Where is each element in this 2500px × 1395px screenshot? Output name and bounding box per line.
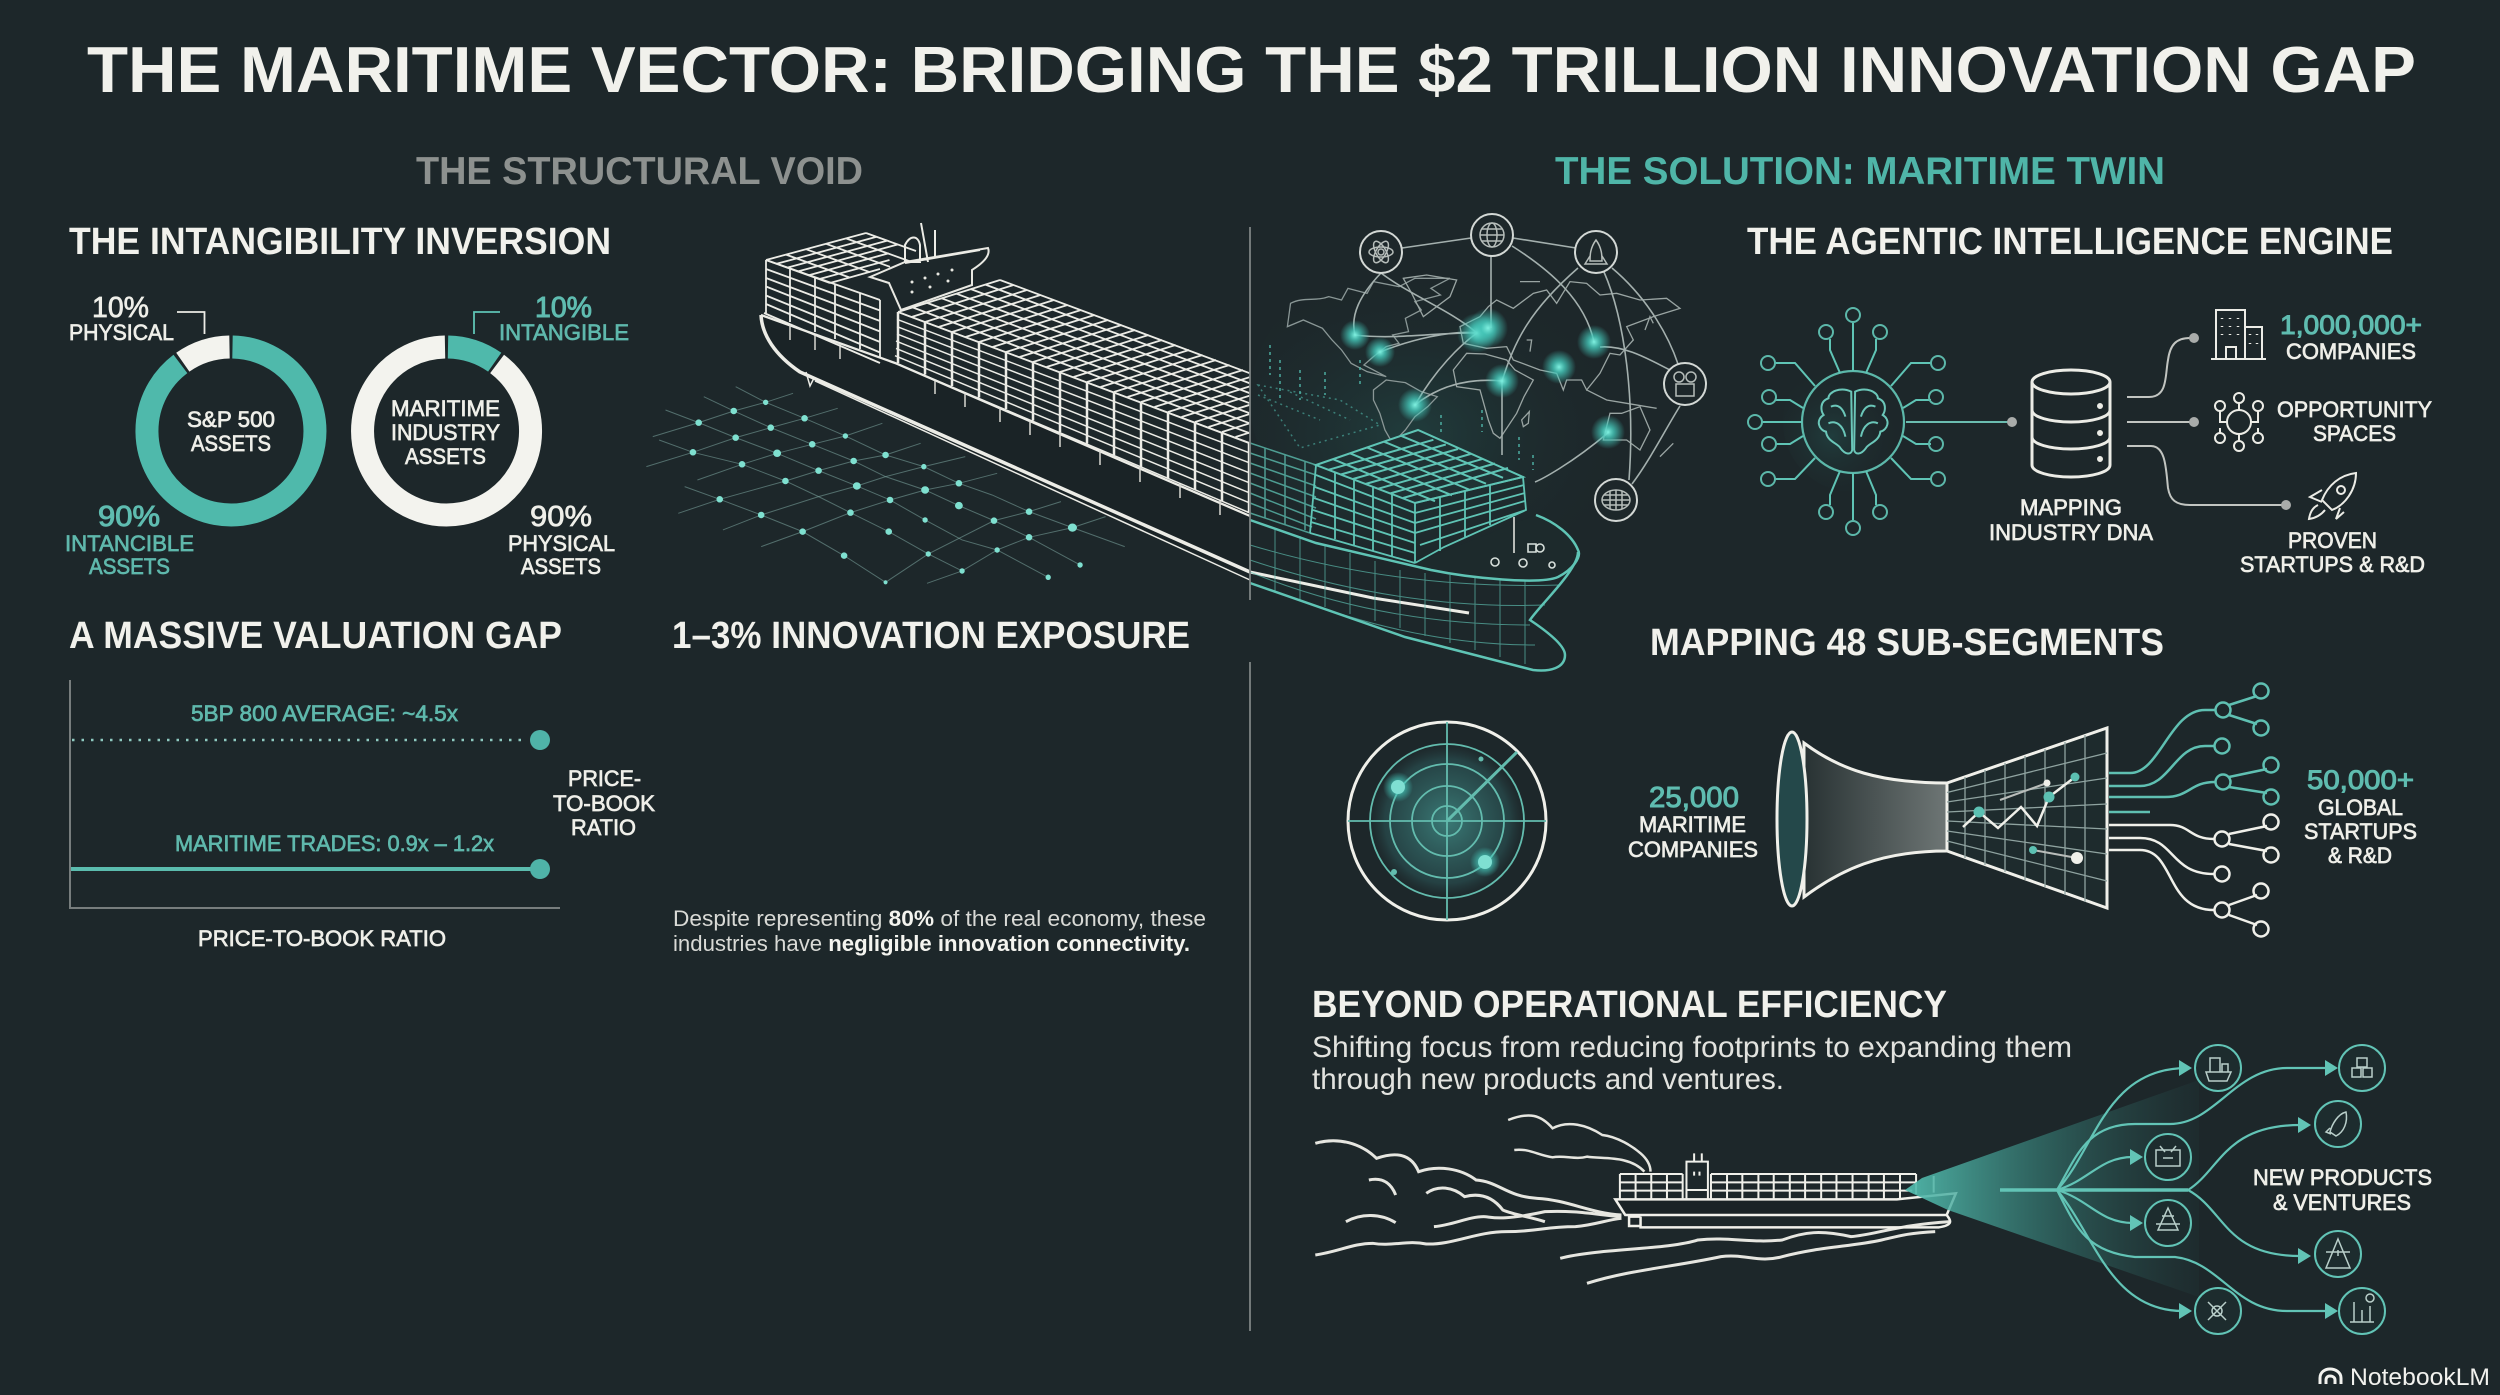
chart: price-to-book comparison: MARITIME TRADES: 0.9x – 1.2x bbox=[175, 831, 494, 856]
icon: outflow branching tree bbox=[2109, 684, 2278, 936]
donut: S&P 500 assets: ASSETS bbox=[191, 431, 271, 456]
label: new products & ventures bbox=[2253, 1165, 2432, 1215]
heading: mapping 48 sub-segments: MAPPING 48 SUB-SEGMENTS bbox=[1650, 622, 2164, 664]
panel: agentic intelligence engine bbox=[1747, 221, 2432, 577]
stat: proven startups: PROVEN bbox=[2288, 528, 2377, 553]
callout: 90% intangible assets: ASSETS bbox=[89, 554, 170, 579]
connectors: database to outputs bbox=[2127, 338, 2282, 505]
branching arrows bbox=[2000, 1068, 2328, 1311]
text block: shifting focus: Shifting focus from reducing footprints to expanding them bbox=[1312, 1031, 2072, 1064]
map: africa, eurasia, australia bbox=[1403, 275, 1680, 457]
panel: mapping 48 sub-segments bbox=[1348, 622, 2417, 936]
donut: maritime industry assets bbox=[363, 347, 531, 515]
icon: brain circuit bbox=[1748, 308, 1945, 535]
icon: radar bbox=[1348, 722, 1546, 920]
panel: innovation exposure: industries have negligible innovation connectivity. bbox=[673, 931, 1190, 956]
heading: intangibility inversion: THE INTANGIBILITY INVERSION bbox=[69, 221, 611, 263]
chart: price-to-book comparison bbox=[70, 680, 655, 951]
superstructure and mast bbox=[870, 223, 989, 310]
callout: 10% physical bbox=[69, 292, 204, 345]
callout: 90% intangible assets: 90% bbox=[98, 501, 160, 533]
title: THE MARITIME VECTOR: BRIDGING THE $2 TRILLION INNOVATION GAP bbox=[87, 33, 2416, 106]
callout: 10% physical: 10% bbox=[92, 292, 149, 324]
label: mapping industry dna: INDUSTRY DNA bbox=[1989, 520, 2153, 545]
illustration: small ship with wake bbox=[1315, 1115, 1956, 1283]
label: new products & ventures: NEW PRODUCTS bbox=[2253, 1165, 2432, 1190]
callout: 90% intangible assets bbox=[65, 501, 194, 579]
divider bbox=[1249, 227, 1251, 1331]
stat: 25,000 maritime companies: COMPANIES bbox=[1628, 837, 1758, 862]
connector endpoints bbox=[2189, 333, 2291, 510]
icon: database bbox=[2032, 370, 2110, 477]
icon: funnel bbox=[1777, 728, 2107, 908]
stat: proven startups bbox=[2240, 528, 2425, 577]
icon: buildings bbox=[2211, 310, 2266, 359]
stat: 1,000,000+ companies: COMPANIES bbox=[2286, 339, 2416, 364]
chart: price-to-book comparison: PRICE- bbox=[568, 766, 641, 791]
stat: opportunity spaces bbox=[2277, 397, 2432, 446]
heading: valuation gap: A MASSIVE VALUATION GAP bbox=[69, 615, 562, 657]
stat: 50,000+ global startups: 50,000+ bbox=[2307, 765, 2414, 795]
stat: 25,000 maritime companies: 25,000 bbox=[1649, 782, 1739, 814]
arrowheads bbox=[2130, 1060, 2338, 1319]
venture icon glyphs bbox=[2156, 1058, 2374, 1322]
stat: 1,000,000+ companies bbox=[2280, 310, 2422, 364]
stat: 50,000+ global startups: & R&D bbox=[2328, 843, 2392, 868]
stat: 25,000 maritime companies: MARITIME bbox=[1639, 812, 1746, 837]
callout: 10% intangible bbox=[474, 292, 629, 345]
smoke and wake bbox=[1315, 1115, 1951, 1283]
mesh: data network under ship bbox=[646, 387, 1125, 584]
chart: price-to-book comparison: 5BP 800 AVERAGE: ~4.5x bbox=[191, 701, 458, 726]
map: americas bbox=[1287, 278, 1450, 443]
venture icons bbox=[2145, 1045, 2385, 1334]
callout: 90% intangible assets: INTANCIBLE bbox=[65, 531, 194, 556]
heading: innovation exposure: 1–3% INNOVATION EXPOSURE bbox=[672, 615, 1190, 657]
donut: S&P 500 assets bbox=[147, 347, 315, 515]
label: mapping industry dna: MAPPING bbox=[2020, 495, 2122, 520]
light cone bbox=[1905, 1080, 2199, 1297]
glowing nodes bbox=[1340, 308, 1625, 449]
label: new products & ventures: & VENTURES bbox=[2273, 1190, 2411, 1215]
panel: beyond operational efficiency bbox=[1312, 984, 2432, 1334]
text block: shifting focus: through new products and ventures. bbox=[1312, 1063, 1784, 1096]
connector: brain to database bbox=[1906, 417, 2017, 427]
text block: shifting focus bbox=[1312, 1031, 2072, 1096]
label: mapping industry dna bbox=[1989, 495, 2153, 545]
stat: opportunity spaces: SPACES bbox=[2313, 421, 2396, 446]
callout: 10% intangible: 10% bbox=[535, 292, 592, 324]
world map network bbox=[1250, 214, 1710, 570]
illustration: container ship bbox=[761, 223, 1579, 670]
panel: innovation exposure bbox=[672, 615, 1206, 956]
donut: maritime industry assets: MARITIME bbox=[391, 396, 500, 421]
chart: price-to-book comparison: PRICE-TO-BOOK RATIO bbox=[198, 926, 446, 951]
stat: opportunity spaces: OPPORTUNITY bbox=[2277, 397, 2432, 422]
callout: 90% physical assets: PHYSICAL bbox=[508, 531, 615, 556]
ship hull: physical half bbox=[761, 315, 1250, 580]
icon: NotebookLM logo bbox=[2320, 1369, 2341, 1384]
network icons bbox=[1360, 214, 1706, 521]
ship body bbox=[1615, 1153, 1956, 1227]
heading: the structural void: THE STRUCTURAL VOID bbox=[416, 150, 863, 193]
heading: beyond operational efficiency: BEYOND OPERATIONAL EFFICIENCY bbox=[1312, 984, 1947, 1026]
stat: 50,000+ global startups: GLOBAL bbox=[2318, 795, 2403, 820]
panel: a massive valuation gap bbox=[69, 615, 655, 951]
stat: proven startups: STARTUPS & R&D bbox=[2240, 552, 2425, 577]
callout: 10% physical: PHYSICAL bbox=[69, 320, 174, 345]
data streams bbox=[1270, 345, 1533, 470]
stat: 1,000,000+ companies: 1,000,000+ bbox=[2280, 310, 2422, 340]
stat: 50,000+ global startups: STARTUPS bbox=[2304, 819, 2417, 844]
stat: 50,000+ global startups bbox=[2304, 765, 2417, 868]
donut: S&P 500 assets: S&P 500 bbox=[187, 407, 275, 432]
watermark: NotebookLM: NotebookLM bbox=[2350, 1364, 2490, 1391]
callout: 10% intangible: INTANGIBLE bbox=[499, 320, 629, 345]
chart: price-to-book comparison: RATIO bbox=[571, 815, 636, 840]
heading: the solution: THE SOLUTION: MARITIME TWIN bbox=[1555, 150, 2165, 193]
callout: 90% physical assets: ASSETS bbox=[521, 554, 601, 579]
donut: maritime industry assets: INDUSTRY bbox=[391, 420, 500, 445]
chart: price-to-book comparison: TO-BOOK bbox=[553, 791, 655, 816]
icon: opportunity network bbox=[2215, 393, 2263, 451]
ship hull: digital twin half bbox=[1250, 515, 1579, 670]
stat: 25,000 maritime companies bbox=[1628, 782, 1758, 862]
container stacks: stern bbox=[764, 233, 916, 363]
container stacks: main cargo bbox=[894, 279, 1250, 514]
callout: 90% physical assets: 90% bbox=[530, 501, 592, 533]
container stacks: digital twin bbox=[1250, 385, 1526, 563]
donut: maritime industry assets: ASSETS bbox=[405, 444, 486, 469]
text block: exposure explanation: Despite representing 80% of the real economy, these bbox=[673, 906, 1206, 931]
icon: rocket bbox=[2309, 473, 2356, 519]
panel: the intangibility inversion bbox=[65, 221, 629, 579]
heading: agentic intelligence engine: THE AGENTIC INTELLIGENCE ENGINE bbox=[1747, 221, 2393, 263]
callout: 90% physical assets bbox=[508, 501, 615, 579]
network arcs bbox=[1354, 238, 1680, 484]
